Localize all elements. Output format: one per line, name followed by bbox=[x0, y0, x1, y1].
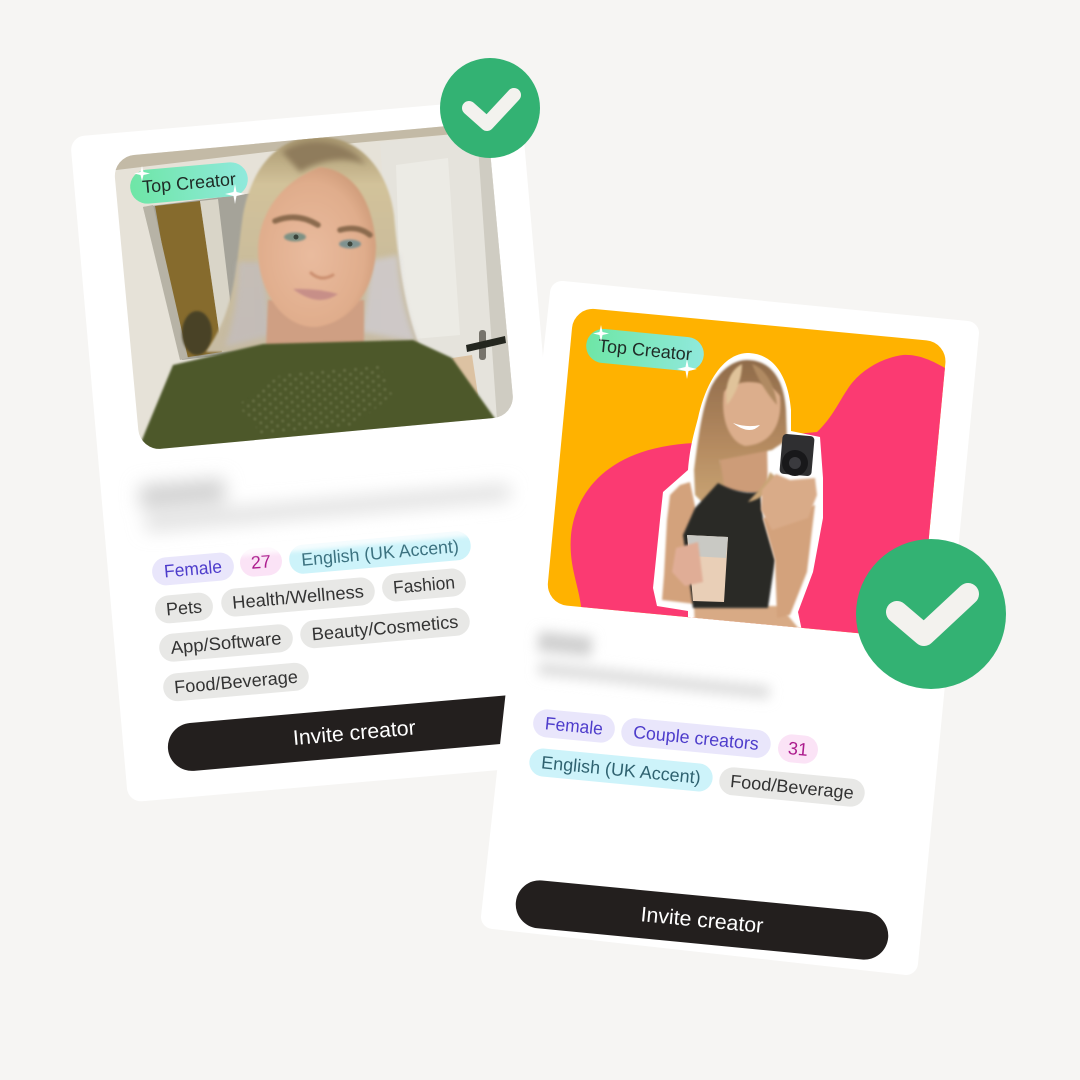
invite button, right card bbox=[514, 878, 890, 962]
panel: right creator card bbox=[493, 290, 967, 963]
tag: English UK Accent bbox=[288, 530, 472, 575]
tag: Fashion: Fashion bbox=[392, 572, 456, 598]
tag: Couple creators: Couple creators bbox=[632, 722, 760, 754]
neck and midriff bbox=[719, 450, 769, 494]
top creator badge, right card: Top Creator bbox=[597, 336, 693, 364]
tag: Beauty/Cosmetics: Beauty/Cosmetics bbox=[311, 612, 459, 644]
invite button, right card: Invite creator bbox=[640, 903, 764, 938]
white haze over language tag bbox=[236, 518, 477, 556]
neck bbox=[266, 300, 364, 347]
tag: App/Software bbox=[158, 623, 294, 663]
right forearm bbox=[763, 505, 815, 618]
hair lock across chest bbox=[748, 472, 777, 502]
face bbox=[723, 382, 780, 446]
tag: Female bbox=[151, 551, 235, 587]
tag: Pets bbox=[154, 592, 214, 624]
sparkles, right badge bbox=[593, 325, 697, 379]
left creator photo bbox=[114, 126, 513, 449]
top creator badge, left card bbox=[129, 161, 249, 205]
tags, left card bbox=[151, 530, 472, 702]
tag: English UK Accent: English (UK Accent) bbox=[300, 536, 460, 570]
camera hand bbox=[761, 474, 817, 530]
face bbox=[258, 167, 376, 327]
drink glass bbox=[687, 535, 728, 602]
tag: Pets: Pets bbox=[165, 596, 203, 620]
tag: age 31: 31 bbox=[787, 738, 809, 760]
sweater bbox=[141, 338, 496, 449]
hair bbox=[206, 137, 422, 352]
tag: Food/Beverage bbox=[162, 662, 310, 702]
top creator badge, right card bbox=[585, 327, 705, 373]
hair bbox=[694, 360, 787, 512]
blurred creator name, right card bbox=[537, 631, 770, 699]
tag: Couple creators bbox=[620, 717, 772, 759]
nose and lips bbox=[311, 273, 333, 278]
tags, right card bbox=[528, 708, 866, 808]
tag: Female: Female bbox=[163, 557, 223, 581]
tag: Female bbox=[532, 708, 616, 744]
panel: left creator card bbox=[70, 98, 579, 802]
invite button, left card: Invite creator bbox=[292, 716, 417, 750]
tag: App/Software: App/Software bbox=[170, 628, 282, 658]
eyebrows and eyes bbox=[275, 217, 318, 225]
tag: Food/Beverage bbox=[718, 766, 866, 808]
infographic canvas bbox=[72, 58, 1006, 975]
black crop top bbox=[683, 483, 775, 608]
glass hand bbox=[672, 542, 703, 586]
top creator badge, left card: Top Creator bbox=[141, 169, 237, 197]
left shoulder and arm bbox=[662, 482, 700, 604]
tag: age 31 bbox=[777, 733, 819, 765]
right creator photo bbox=[548, 308, 946, 634]
tag: Fashion bbox=[381, 567, 467, 603]
pink blobs bbox=[570, 355, 950, 660]
tag: age 27: 27 bbox=[250, 551, 272, 573]
tag: age 27 bbox=[239, 546, 283, 578]
tag: English UK Accent bbox=[528, 747, 714, 793]
icon: small green check badge bbox=[440, 58, 540, 158]
white sticker outline bbox=[653, 353, 823, 650]
tag: Food/Beverage: Food/Beverage bbox=[173, 667, 299, 697]
icon: large green check badge bbox=[856, 539, 1006, 689]
tag: Health/Wellness: Health/Wellness bbox=[231, 581, 365, 613]
tag: Health/Wellness bbox=[220, 576, 376, 618]
blurred creator name, left card bbox=[139, 478, 510, 531]
tag: English UK Accent: English (UK Accent) bbox=[540, 752, 702, 788]
tag: Beauty/Cosmetics bbox=[299, 607, 471, 649]
invite button, left card bbox=[166, 690, 569, 773]
sparkles, left badge bbox=[134, 166, 245, 204]
tag: Food/Beverage: Food/Beverage bbox=[729, 771, 855, 803]
camera bbox=[779, 434, 815, 476]
tag: Female: Female bbox=[544, 713, 604, 739]
